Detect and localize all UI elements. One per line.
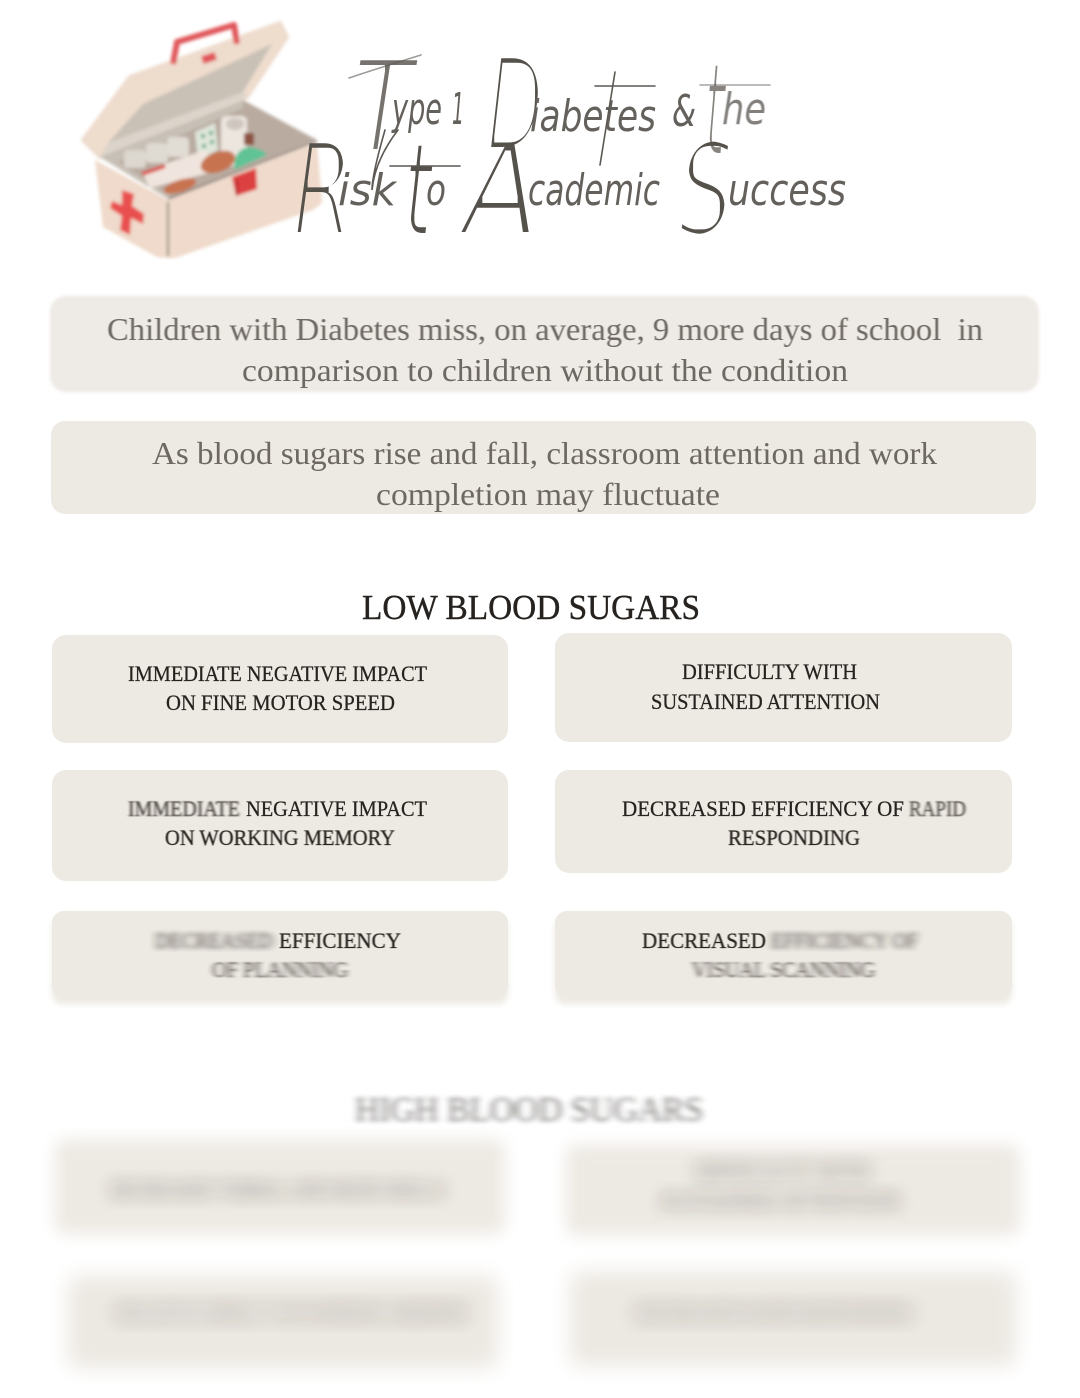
title line 1: he xyxy=(722,84,766,135)
title line 2: R xyxy=(292,114,354,266)
icon: first aid kit xyxy=(83,23,322,258)
intro panel: attention: completion may fluctuate xyxy=(376,476,720,512)
card: high blood sugars 1: DECREASED VERBAL AND MATH SKILLS xyxy=(110,1177,445,1202)
card: working memory: IMMEDIATE xyxy=(128,796,240,821)
title line 2: o xyxy=(426,165,446,216)
card: visual scanning: VISUAL SCANNING xyxy=(692,957,875,982)
card: fine motor speed: IMMEDIATE NEGATIVE IMPACT xyxy=(128,661,428,686)
title line 1: 1 xyxy=(452,84,464,135)
title line 2: uccess xyxy=(728,165,846,216)
card: sustained attention xyxy=(555,633,1012,742)
kit lid xyxy=(83,23,287,157)
title xyxy=(292,29,846,266)
title line 2: A xyxy=(456,114,540,266)
heading: low blood sugars: LOW BLOOD SUGARS xyxy=(362,588,700,627)
card: rapid responding: DECREASED EFFICIENCY OF xyxy=(622,796,904,821)
intro panel: missed school xyxy=(50,296,1039,392)
title line 1: t xyxy=(704,34,728,186)
red clasp xyxy=(232,168,257,196)
title line 2: t xyxy=(404,114,434,266)
intro panel: attention: As blood sugars rise and fall, classroom attention and work xyxy=(152,435,937,471)
card: rapid responding: RAPID xyxy=(909,796,966,821)
heading: high blood sugars: HIGH BLOOD SUGARS xyxy=(355,1090,703,1129)
card: sustained attention: DIFFICULTY WITH xyxy=(682,659,857,684)
card: working memory: NEGATIVE IMPACT xyxy=(246,796,428,821)
card: rapid responding: RESPONDING xyxy=(728,825,860,850)
card: high blood sugars 2 xyxy=(566,1145,1020,1235)
title line 2 xyxy=(292,114,846,266)
card: high blood sugars 3: NEGATIVE IMPACT ON WORKING MEMORY xyxy=(115,1300,470,1325)
card: working memory: ON WORKING MEMORY xyxy=(165,825,395,850)
title line 2: S xyxy=(678,114,734,266)
title line 1: & xyxy=(672,86,696,137)
card: planning: DECREASED xyxy=(155,928,273,953)
kit handle xyxy=(173,25,237,64)
card: high blood sugars 1 xyxy=(55,1140,505,1234)
card: visual scanning xyxy=(555,911,1012,1004)
card: rapid responding xyxy=(555,770,1012,873)
card: fine motor speed: ON FINE MOTOR SPEED xyxy=(166,690,395,715)
title line 2: cademic xyxy=(528,165,660,216)
title line 1: D xyxy=(486,29,544,181)
card: sustained attention: SUSTAINED ATTENTION xyxy=(651,689,880,714)
card: planning xyxy=(52,911,508,1004)
intro panel: attention xyxy=(51,421,1036,514)
card: visual scanning: EFFICIENCY OF xyxy=(771,928,918,953)
title line 1 xyxy=(352,29,766,186)
intro panel: missed school: Children with Diabetes miss, on average, 9 more days of school in xyxy=(107,311,983,347)
intro panel: missed school: comparison to children without the condition xyxy=(242,352,848,388)
title line 1: ype xyxy=(391,84,442,135)
card: working memory xyxy=(52,770,508,881)
kit interior xyxy=(100,100,317,200)
card: visual scanning: DECREASED xyxy=(642,928,766,953)
kit front faces xyxy=(95,141,322,258)
icon: red cross xyxy=(110,190,144,235)
card: planning: EFFICIENCY xyxy=(279,928,401,953)
card: fine motor speed xyxy=(52,635,508,743)
title line 1: T xyxy=(352,31,421,183)
card: planning: OF PLANNING xyxy=(212,957,348,982)
card: high blood sugars 3 xyxy=(68,1276,498,1368)
card: high blood sugars 2: SUSTAINED ATTENTION xyxy=(660,1188,900,1213)
card: high blood sugars 4 xyxy=(570,1272,1016,1366)
title line 1: iabetes xyxy=(530,91,656,142)
title line 2: isk xyxy=(338,165,397,216)
card: high blood sugars 2: DIFFICULTY WITH xyxy=(695,1158,870,1183)
card: high blood sugars 4: DECREASED RAPID RESPONDING xyxy=(635,1300,915,1325)
